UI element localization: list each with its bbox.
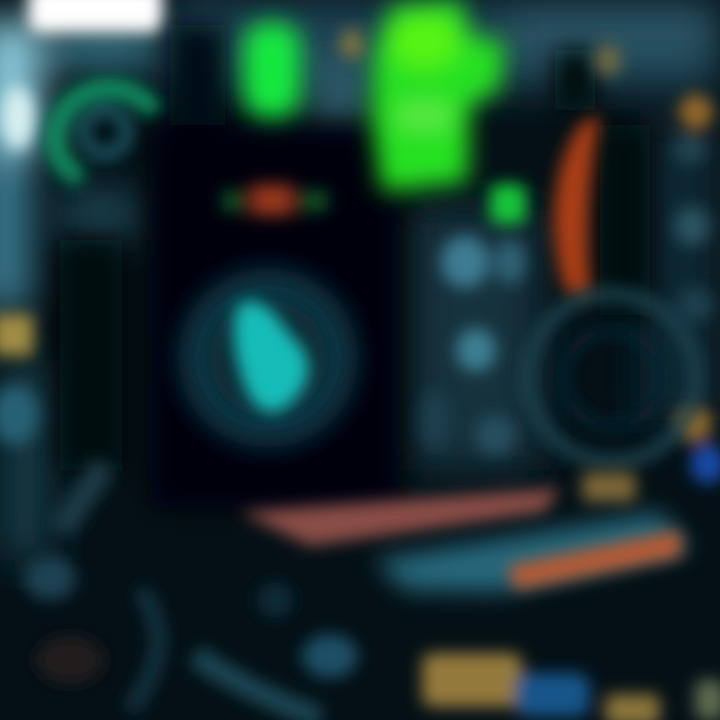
circular fan [178,268,358,448]
green glow: small square [490,184,526,224]
small round components: centre [421,236,526,455]
left edge components [0,314,105,600]
orange vertical strip [554,116,600,296]
large ring: lower right [528,294,696,462]
bottom components [36,582,720,720]
fan ring [178,268,358,448]
tan part near keyboard [582,472,636,502]
right column components [340,29,720,484]
keyboard: orange strip [508,530,682,590]
white highlight: top left [2,0,163,150]
green glow: left block [243,22,301,118]
green glow: central block [372,0,505,192]
tower indicator lights [222,184,328,216]
light panel: top left [0,20,160,310]
keyboard: upper salmon strip [240,488,560,546]
green ring: top left [56,88,155,178]
dark tower body [60,25,650,510]
keyboard: teal deck [375,512,690,592]
fan inner [210,300,326,416]
background: haze [0,0,720,560]
fan glowing core [234,301,309,413]
